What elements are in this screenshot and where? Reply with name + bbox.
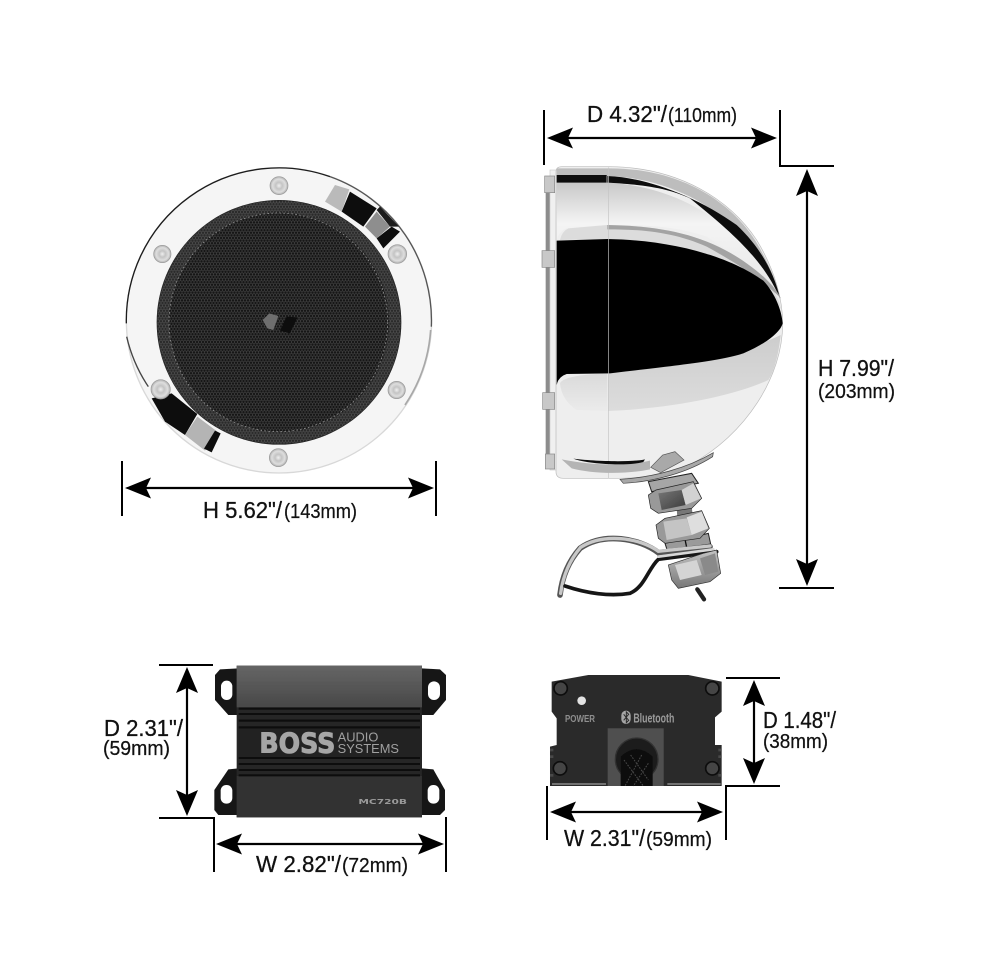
- bluetooth label: Bluetooth: [633, 711, 674, 725]
- end depth label: [763, 707, 837, 753]
- thin grey reflection band: [607, 225, 781, 298]
- width label: (143mm): [284, 501, 357, 523]
- braided cable: [621, 749, 653, 786]
- height extension line: [779, 587, 834, 589]
- centre label panel: [239, 729, 420, 757]
- speaker side height dimension: [779, 169, 895, 588]
- heat sink ribs: [239, 709, 420, 775]
- ring upper-left edge shadow: [126, 168, 330, 323]
- threaded stud and washers: [648, 473, 711, 551]
- mounting bracket plate: [620, 452, 713, 483]
- amplifier end depth dimension: [726, 678, 837, 840]
- amp depth label: (59mm): [103, 738, 170, 760]
- depth label: D 4.32"/: [587, 101, 668, 127]
- height label: (203mm): [818, 381, 895, 403]
- rear grille edge and mounting clips: [542, 170, 557, 470]
- amplifier end view photo: [550, 675, 722, 786]
- model number: MC720B: [358, 797, 408, 806]
- audio systems wordmark: SYSTEMS: [338, 742, 399, 756]
- amp width label: [256, 851, 408, 877]
- main black reflection: [557, 239, 783, 385]
- end width arrow: [550, 802, 723, 822]
- chrome ring: [126, 168, 432, 473]
- cable connector plate: [608, 728, 664, 786]
- amplifier top view photo: [214, 666, 446, 817]
- amp depth arrow: [176, 667, 198, 816]
- end width extension line: [546, 786, 548, 840]
- upper-right chrome reflection: [325, 185, 400, 248]
- end depth extension lines: [726, 678, 780, 840]
- lower panel: [237, 776, 422, 817]
- middle hex nut: [656, 511, 709, 543]
- amp depth label: D 2.31"/: [104, 715, 184, 741]
- depth label: (110mm): [668, 105, 737, 127]
- speaker housing: [556, 167, 783, 478]
- audio systems wordmark: [338, 730, 399, 756]
- side rib notches: [550, 749, 722, 777]
- amplifier depth dimension: [103, 665, 214, 872]
- lower chrome band, front section: [608, 335, 781, 411]
- ring right edge shadow: [330, 177, 431, 327]
- height label: [818, 355, 895, 403]
- mounting holes: [221, 681, 440, 804]
- ring lower-left edge shadow: [127, 337, 148, 387]
- amp depth label: [103, 715, 184, 760]
- upper chrome band: [557, 183, 780, 298]
- band between reflection and black: [560, 225, 782, 310]
- grille mesh: [157, 201, 401, 444]
- corner screws: [553, 682, 719, 775]
- end width label: (59mm): [646, 829, 712, 851]
- bottom dark stripe: [573, 459, 645, 464]
- top rim highlight: [557, 168, 781, 300]
- width arrow: [125, 478, 434, 498]
- ring lower-right edge shadow: [405, 330, 431, 405]
- height label: H 7.99"/: [818, 355, 895, 381]
- brand logo: BOSS: [259, 727, 335, 760]
- speaker front width dimension: [122, 461, 436, 523]
- cable grommet: [615, 738, 658, 781]
- depth label: [587, 101, 737, 127]
- end depth label: (38mm): [763, 731, 828, 753]
- amp width arrow: [216, 834, 444, 854]
- height arrow: [796, 169, 818, 586]
- width label: H 5.62"/: [203, 497, 283, 523]
- lower chrome band, rear section: [560, 373, 607, 411]
- lower-left chrome reflection: [152, 393, 221, 452]
- depth arrow: [547, 128, 777, 148]
- bottom chrome reflection: [562, 459, 650, 473]
- end depth arrow: [743, 680, 765, 784]
- depth extension lines: [544, 110, 834, 166]
- grille centre logo: [263, 313, 297, 333]
- grille outer band: [163, 206, 395, 438]
- width extension lines: [122, 461, 436, 516]
- ring screws: [151, 177, 407, 467]
- end plate: [550, 675, 722, 786]
- amplifier width dimension: [216, 817, 446, 877]
- amp depth extension line: [159, 665, 214, 872]
- speaker side depth dimension: [544, 101, 834, 166]
- speaker front view photo: [126, 168, 432, 473]
- bluetooth icon: [621, 711, 631, 724]
- upper hex nut: [648, 482, 702, 513]
- power label: POWER: [565, 714, 595, 725]
- mounting tabs: [214, 668, 446, 815]
- lower edge highlights: [552, 782, 721, 786]
- top dark stripe: [557, 175, 780, 298]
- amplifier body: [237, 666, 422, 817]
- end width label: [564, 825, 712, 851]
- speaker side view photo: [542, 167, 783, 599]
- speaker grille: [157, 200, 401, 445]
- audio systems wordmark: AUDIO: [338, 730, 378, 744]
- grille inner retaining ring: [169, 213, 388, 432]
- amp width extension line: [445, 817, 447, 872]
- top panel: [237, 666, 422, 707]
- end width label: W 2.31"/: [564, 825, 646, 851]
- amp width label: (72mm): [342, 855, 408, 877]
- amp width label: W 2.82"/: [256, 851, 342, 877]
- wire end: [697, 589, 704, 599]
- amplifier end width dimension: [547, 786, 723, 851]
- clamp strap: [560, 538, 717, 595]
- housing seam: [607, 167, 609, 478]
- width label: [203, 497, 357, 523]
- lower acorn nut: [668, 550, 721, 588]
- power LED: [577, 696, 586, 705]
- end depth label: D 1.48"/: [763, 707, 837, 733]
